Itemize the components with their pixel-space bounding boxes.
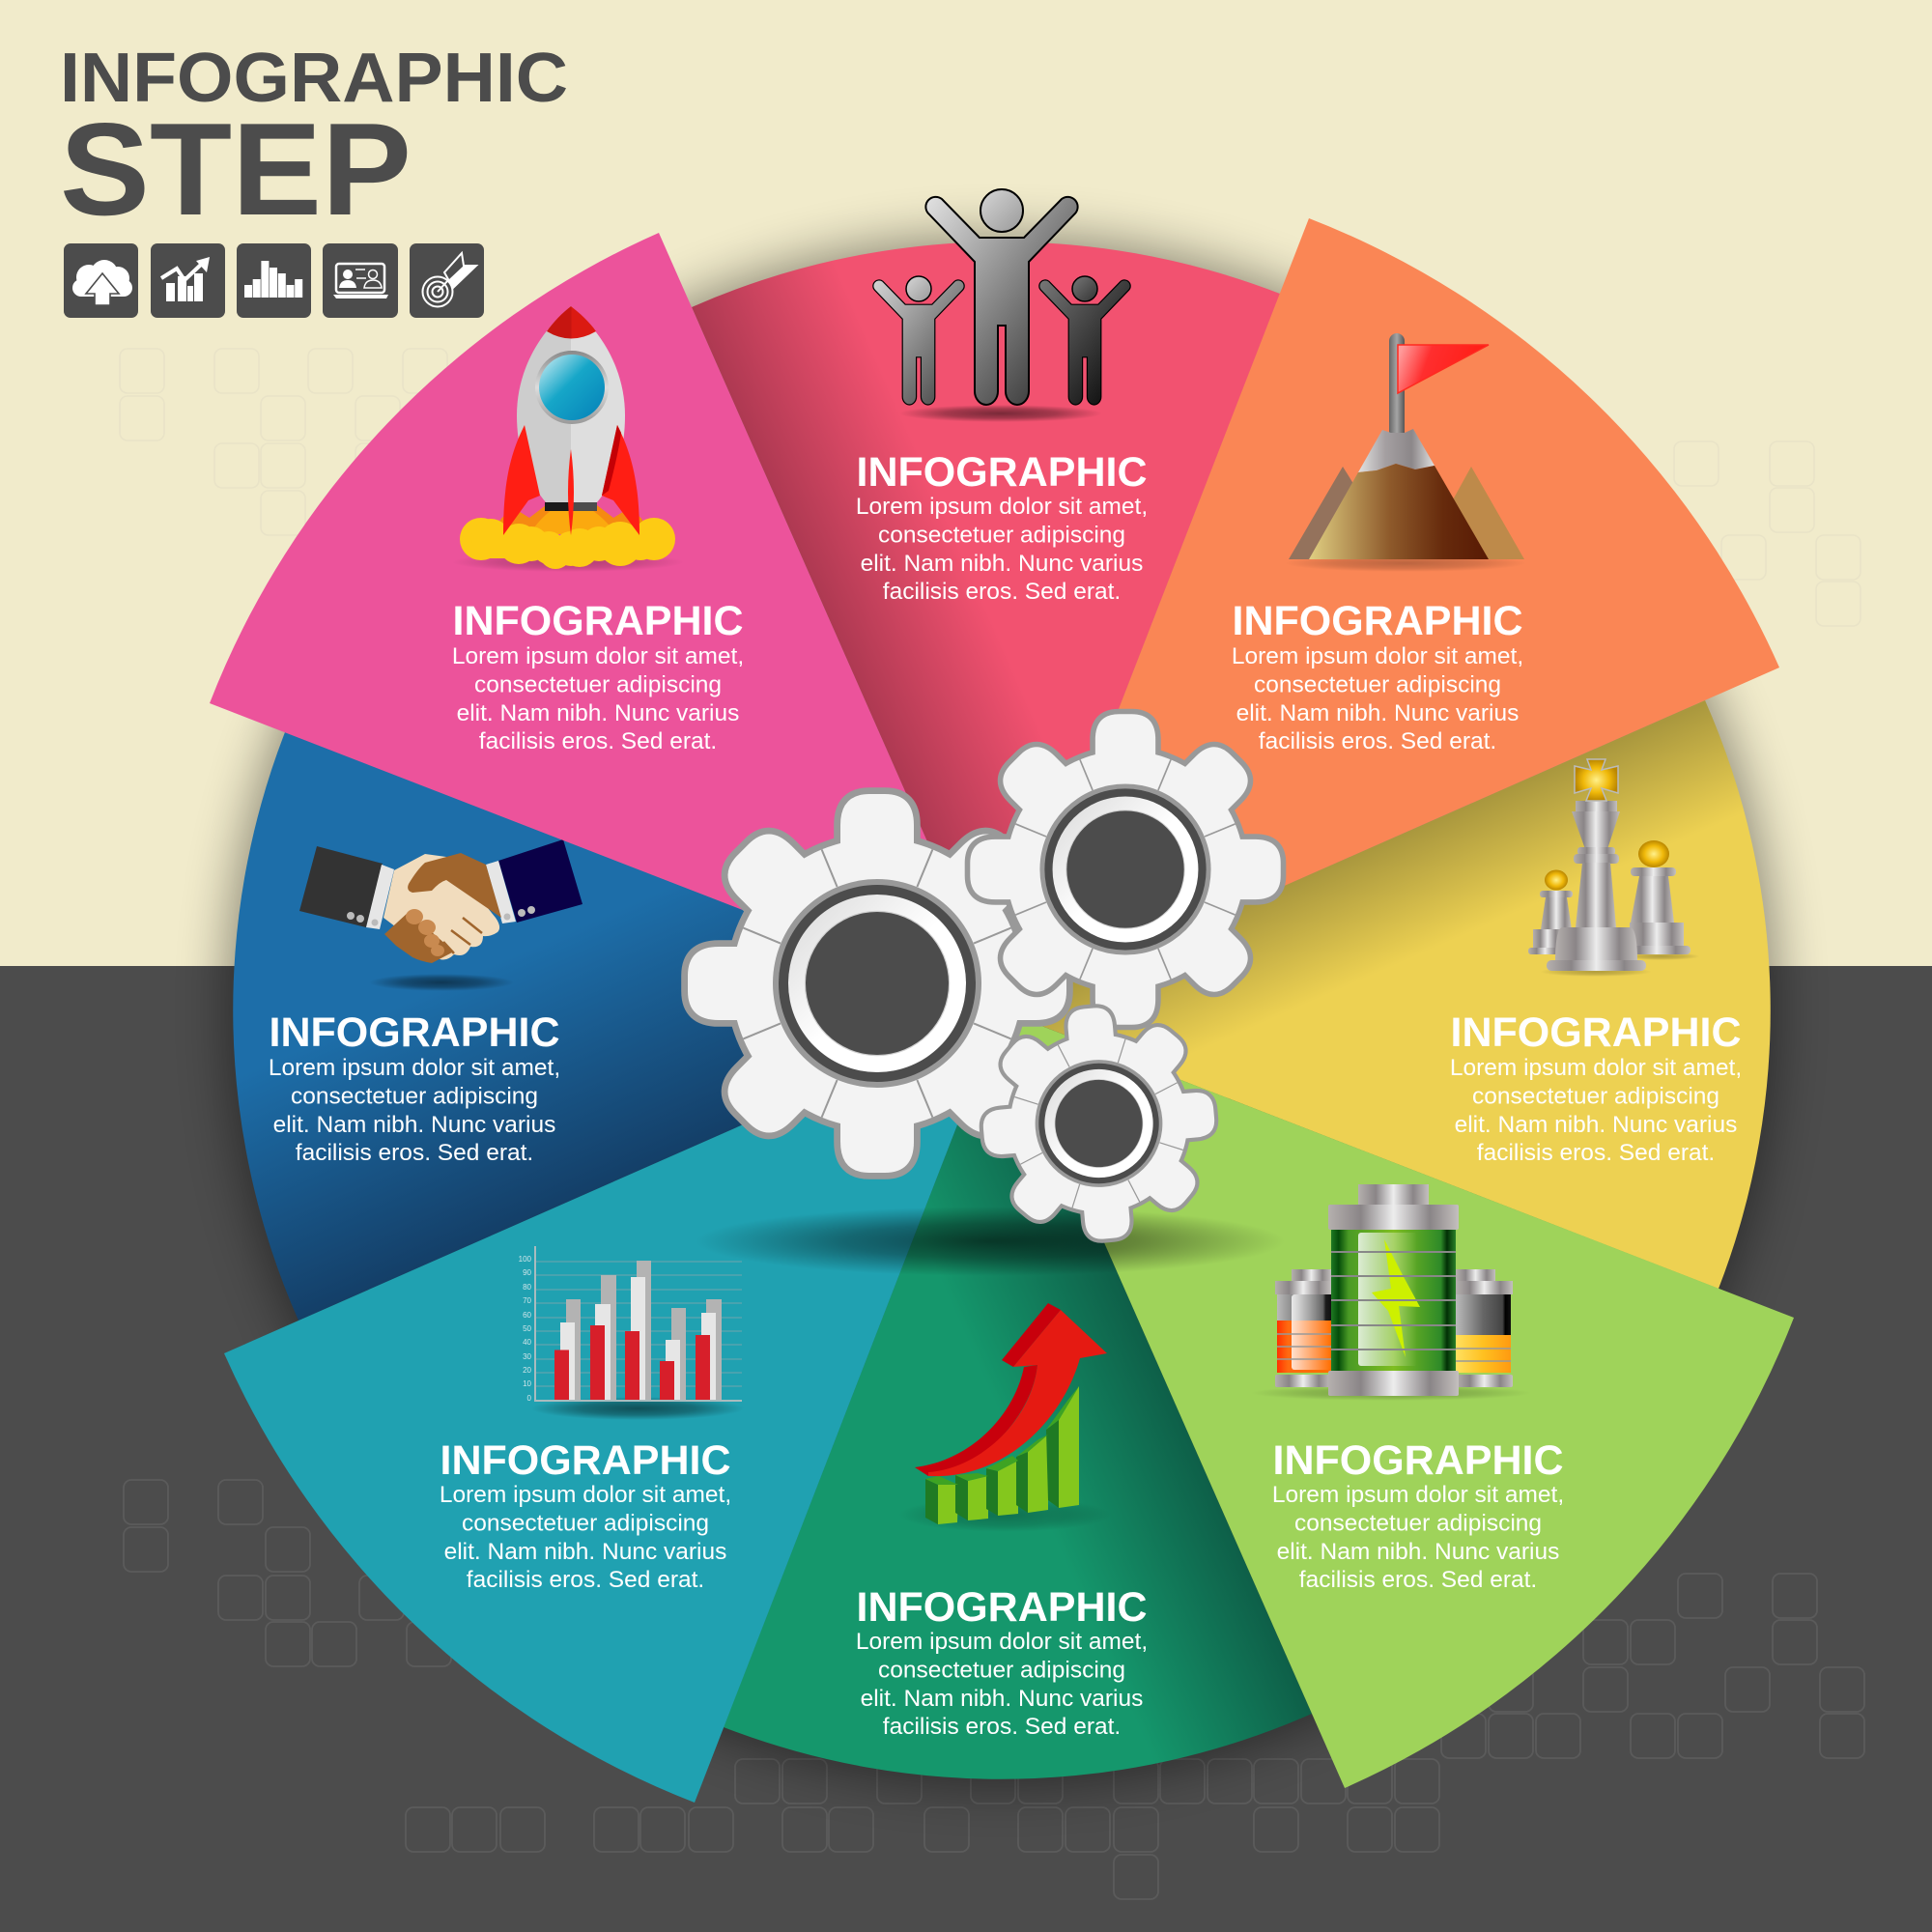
icon: bar chart (237, 243, 311, 318)
chart: bars: 90 (523, 1268, 532, 1277)
text block: orange: consectetuer adipiscing (1254, 672, 1501, 697)
text block: pink: Lorem ipsum dolor sit amet, (452, 643, 744, 669)
text block: orange (1232, 598, 1523, 754)
gear shadow (696, 1207, 1285, 1276)
icon: rocket (452, 306, 684, 572)
icon: target arrow (410, 243, 484, 318)
text block: lime: consectetuer adipiscing (1294, 1511, 1542, 1536)
text block: pink: elit. Nam nibh. Nunc varius (457, 700, 739, 726)
text block: lime: Lorem ipsum dolor sit amet, (1272, 1482, 1564, 1508)
text block: blue: elit. Nam nibh. Nunc varius (273, 1112, 555, 1138)
title: INFOGRAPHIC (60, 40, 568, 117)
icon: laptop video call (323, 243, 398, 318)
text block: red (856, 449, 1148, 605)
gear: small (974, 998, 1224, 1249)
icon: mountain with flag (1285, 333, 1526, 572)
text block: dark green: consectetuer adipiscing (878, 1658, 1125, 1683)
icon: batteries (1251, 1184, 1531, 1401)
text block: dark green: facilisis eros. Sed erat. (883, 1714, 1121, 1740)
text block: orange: Lorem ipsum dolor sit amet, (1232, 643, 1523, 669)
chart: bars: 30 (523, 1352, 532, 1361)
text block: teal: facilisis eros. Sed erat. (467, 1567, 704, 1593)
pattern: cream squares (120, 349, 1861, 626)
icon: growth chart (151, 243, 225, 318)
title (60, 40, 568, 242)
text block: teal: consectetuer adipiscing (462, 1511, 709, 1536)
chart: bars: 100 (519, 1255, 532, 1264)
text block: pink (452, 598, 744, 754)
chart: bars: 80 (523, 1283, 532, 1292)
text block: blue: consectetuer adipiscing (291, 1084, 538, 1109)
text block: teal: Lorem ipsum dolor sit amet, (440, 1482, 731, 1508)
chart: bars: 0 (527, 1394, 532, 1403)
text block: yellow (1450, 1009, 1742, 1166)
chart: bars: 60 (523, 1311, 532, 1320)
chart: bars: 20 (523, 1366, 532, 1375)
chart: bars: 50 (523, 1324, 532, 1333)
text block: yellow: elit. Nam nibh. Nunc varius (1455, 1112, 1737, 1138)
text block: orange: elit. Nam nibh. Nunc varius (1236, 700, 1519, 726)
text block: dark green (856, 1584, 1148, 1740)
text block: pink: INFOGRAPHIC (452, 598, 744, 644)
text block: lime: elit. Nam nibh. Nunc varius (1277, 1539, 1559, 1565)
text block: lime: INFOGRAPHIC (1273, 1437, 1563, 1484)
icon: chess pieces (1528, 759, 1700, 977)
panel: blue wedge, handshake (233, 732, 1002, 1321)
panel: pink wedge, rocket (210, 233, 1002, 1010)
circle drop shadow (227, 236, 1776, 1785)
text block: pink: consectetuer adipiscing (474, 672, 722, 697)
text block: dark green: Lorem ipsum dolor sit amet, (856, 1629, 1148, 1655)
text block: teal: INFOGRAPHIC (440, 1437, 730, 1484)
text block: blue: Lorem ipsum dolor sit amet, (269, 1055, 560, 1081)
panel: orange wedge, mountain (1002, 218, 1779, 1010)
title: STEP (60, 96, 412, 242)
panel: yellow wedge, chess (1002, 700, 1771, 1289)
text block: red: Lorem ipsum dolor sit amet, (856, 494, 1148, 520)
panel: dark green wedge, arrow (724, 1010, 1312, 1779)
icon row (64, 243, 484, 318)
text block: yellow: Lorem ipsum dolor sit amet, (1450, 1055, 1742, 1081)
icon: cloud upload (64, 243, 138, 318)
gear: large (688, 794, 1066, 1173)
text block: yellow: consectetuer adipiscing (1472, 1084, 1719, 1109)
icon: handshake (299, 839, 582, 991)
panel: red wedge, people (692, 189, 1280, 1010)
background: dark bottom (0, 966, 1932, 1932)
text block: pink: facilisis eros. Sed erat. (479, 728, 717, 754)
text block: lime (1272, 1437, 1564, 1593)
text block: red: INFOGRAPHIC (856, 449, 1148, 496)
text block: yellow: INFOGRAPHIC (1451, 1009, 1741, 1056)
text block: dark green: INFOGRAPHIC (856, 1584, 1148, 1631)
gear: medium (970, 714, 1281, 1025)
pattern: dark squares (124, 1480, 1864, 1899)
text block: lime: facilisis eros. Sed erat. (1299, 1567, 1537, 1593)
text block: teal (440, 1437, 731, 1593)
chart: bars (519, 1246, 744, 1420)
text block: blue: INFOGRAPHIC (269, 1009, 560, 1056)
text block: dark green: elit. Nam nibh. Nunc varius (861, 1686, 1143, 1712)
panel: lime wedge, batteries (1002, 1010, 1794, 1788)
background: cream top (0, 0, 1932, 966)
text block: red: elit. Nam nibh. Nunc varius (861, 551, 1143, 577)
text block: red: facilisis eros. Sed erat. (883, 579, 1121, 605)
text block: yellow: facilisis eros. Sed erat. (1477, 1140, 1715, 1166)
text block: red: consectetuer adipiscing (878, 522, 1125, 549)
text block: teal: elit. Nam nibh. Nunc varius (444, 1539, 726, 1565)
text block: blue (269, 1009, 560, 1166)
chart: bars: 40 (523, 1338, 532, 1347)
chart: bars: 10 (523, 1379, 532, 1388)
icon: three people with arms raised (873, 189, 1130, 422)
text block: blue: facilisis eros. Sed erat. (296, 1140, 533, 1166)
text block: orange: facilisis eros. Sed erat. (1259, 728, 1496, 754)
text block: orange: INFOGRAPHIC (1233, 598, 1522, 644)
chart: bars: 70 (523, 1296, 532, 1305)
icon: growth arrow (898, 1303, 1111, 1532)
panel: teal wedge, bar chart (224, 1010, 1002, 1803)
